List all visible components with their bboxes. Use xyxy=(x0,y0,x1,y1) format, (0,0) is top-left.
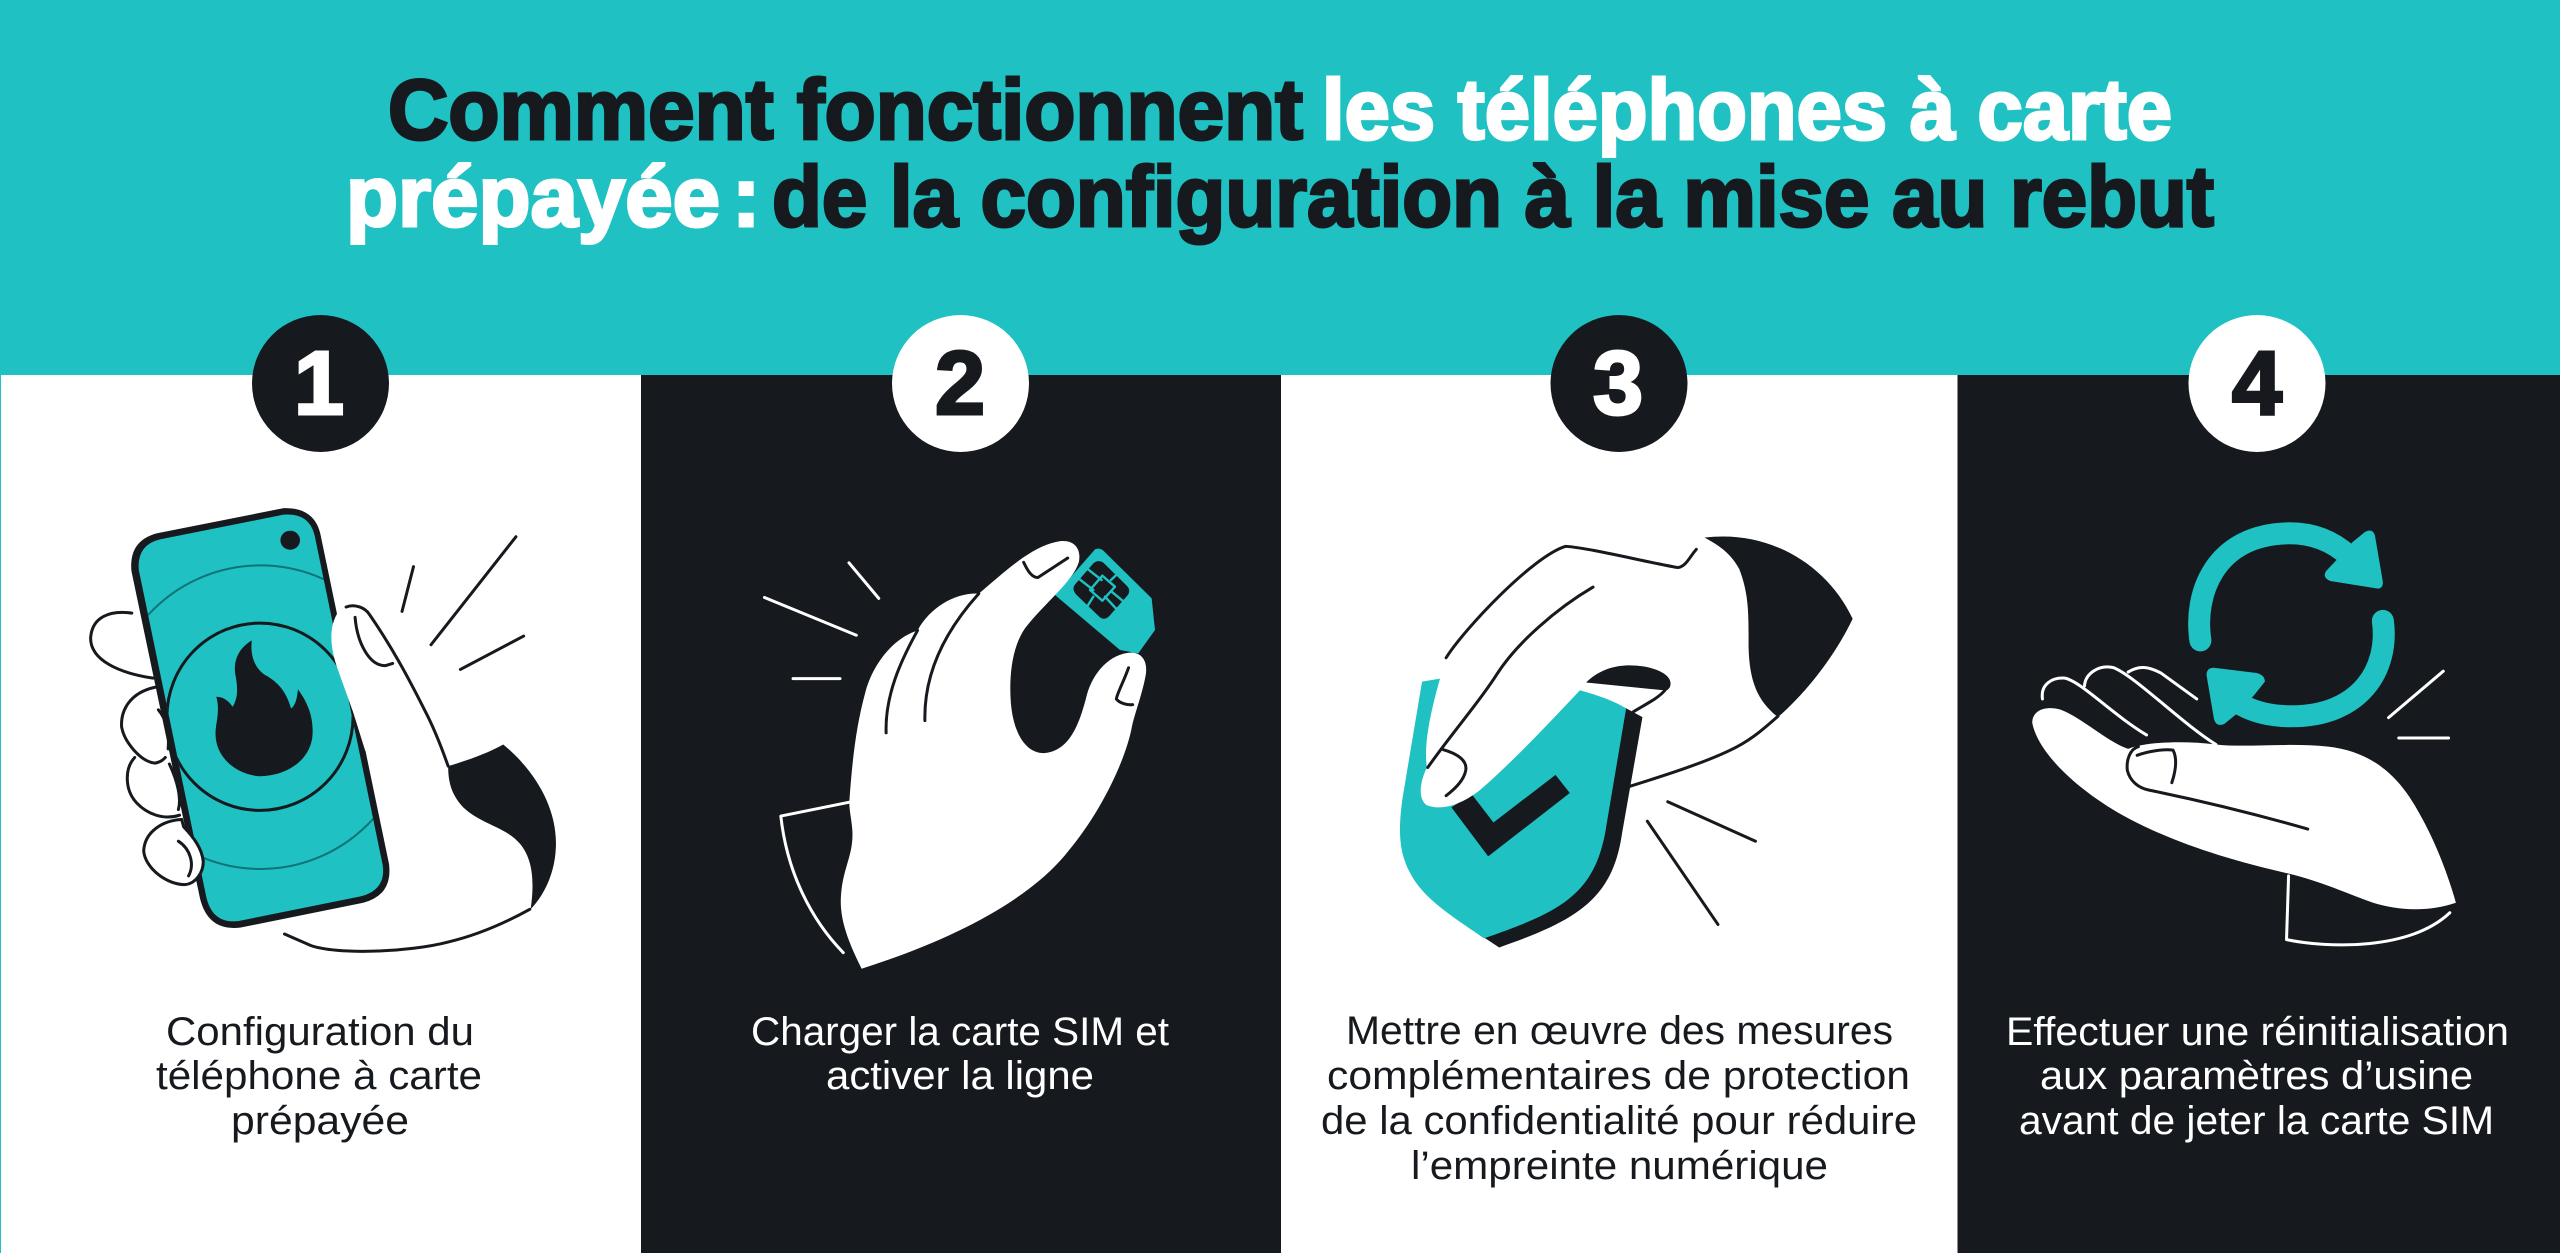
text: step 3 xyxy=(1321,1009,1917,1188)
fingers xyxy=(91,612,203,885)
text: step 4 xyxy=(2006,1010,2509,1143)
SIM card xyxy=(1055,549,1155,653)
badge 2 xyxy=(892,315,1029,452)
hand xyxy=(2032,708,2456,909)
phone screen xyxy=(139,514,383,921)
title: prépayée xyxy=(346,150,720,245)
badge 2: 2 xyxy=(935,334,985,434)
thumb gap xyxy=(1586,665,1671,691)
badge 4: 4 xyxy=(2232,334,2282,434)
title: : xyxy=(732,150,760,245)
sleeve xyxy=(1704,537,1853,717)
badge 1 xyxy=(252,315,389,452)
finger outlines xyxy=(2042,667,2216,744)
text: step 3: complémentaires de protection xyxy=(1327,1054,1910,1098)
text: step 1: téléphone à carte xyxy=(156,1054,482,1098)
header band xyxy=(0,0,2560,375)
title: de la configuration à la mise au rebut xyxy=(772,150,2214,245)
sleeve xyxy=(448,744,556,909)
cuff xyxy=(781,802,849,953)
index finger xyxy=(1421,638,1580,807)
wrist line xyxy=(284,909,530,951)
motion rays xyxy=(402,537,524,669)
hand lines xyxy=(1428,546,1778,796)
panel 3: privacy xyxy=(1281,315,1958,1253)
hand xyxy=(841,541,1146,969)
badge 1: 1 xyxy=(294,334,344,434)
badge 4 xyxy=(2188,315,2326,452)
badge 3: 3 xyxy=(1593,334,1643,434)
text: step 4: avant de jeter la carte SIM xyxy=(2019,1099,2494,1143)
checkmark xyxy=(1451,775,1570,856)
text: step 1: Configuration du xyxy=(166,1010,474,1054)
motion rays xyxy=(1647,802,1756,924)
text: step 3: de la confidentialité pour réduire xyxy=(1321,1099,1917,1143)
panel 2: SIM card xyxy=(641,315,1281,1253)
motion rays xyxy=(764,563,879,679)
text: step 2: Charger la carte SIM et xyxy=(751,1010,1169,1054)
text: step 3: Mettre en œuvre des mesures xyxy=(1346,1009,1893,1053)
cuff xyxy=(2287,876,2450,945)
thumb outline xyxy=(346,606,448,766)
finger lines xyxy=(886,558,1133,733)
shield xyxy=(1400,679,1626,938)
illustration: hand on shield xyxy=(1400,537,1853,947)
panel 1: phone setup xyxy=(1,315,641,1253)
screen rings xyxy=(148,564,374,870)
illustration: open hand with refresh arrows xyxy=(2032,531,2456,945)
thumb xyxy=(331,604,369,751)
text: step 2: activer la ligne xyxy=(826,1054,1094,1098)
text: step 4: aux paramètres d’usine xyxy=(2040,1054,2473,1098)
camera dot xyxy=(280,531,300,550)
illustration: hand holding SIM card xyxy=(764,541,1146,969)
refresh arrows xyxy=(2199,531,2384,725)
title: les téléphones à carte xyxy=(1322,63,2172,158)
title xyxy=(346,63,2214,245)
thumb lines xyxy=(2127,747,2308,829)
text: step 2 xyxy=(751,1010,1169,1098)
illustration: hand holding phone with flame xyxy=(91,508,556,951)
text: step 4: Effectuer une réinitialisation xyxy=(2006,1010,2509,1054)
text: step 1: prépayée xyxy=(231,1099,409,1143)
phone body xyxy=(131,508,389,928)
title: Comment fonctionnent xyxy=(388,63,1303,158)
text: step 1 xyxy=(156,1010,482,1143)
text: step 3: l’empreinte numérique xyxy=(1411,1144,1828,1188)
flame icon xyxy=(216,640,313,776)
motion rays xyxy=(2389,671,2449,738)
panel 4: factory reset xyxy=(1958,315,2560,1253)
badge 3 xyxy=(1550,315,1688,452)
shield shadow xyxy=(1484,708,1642,947)
